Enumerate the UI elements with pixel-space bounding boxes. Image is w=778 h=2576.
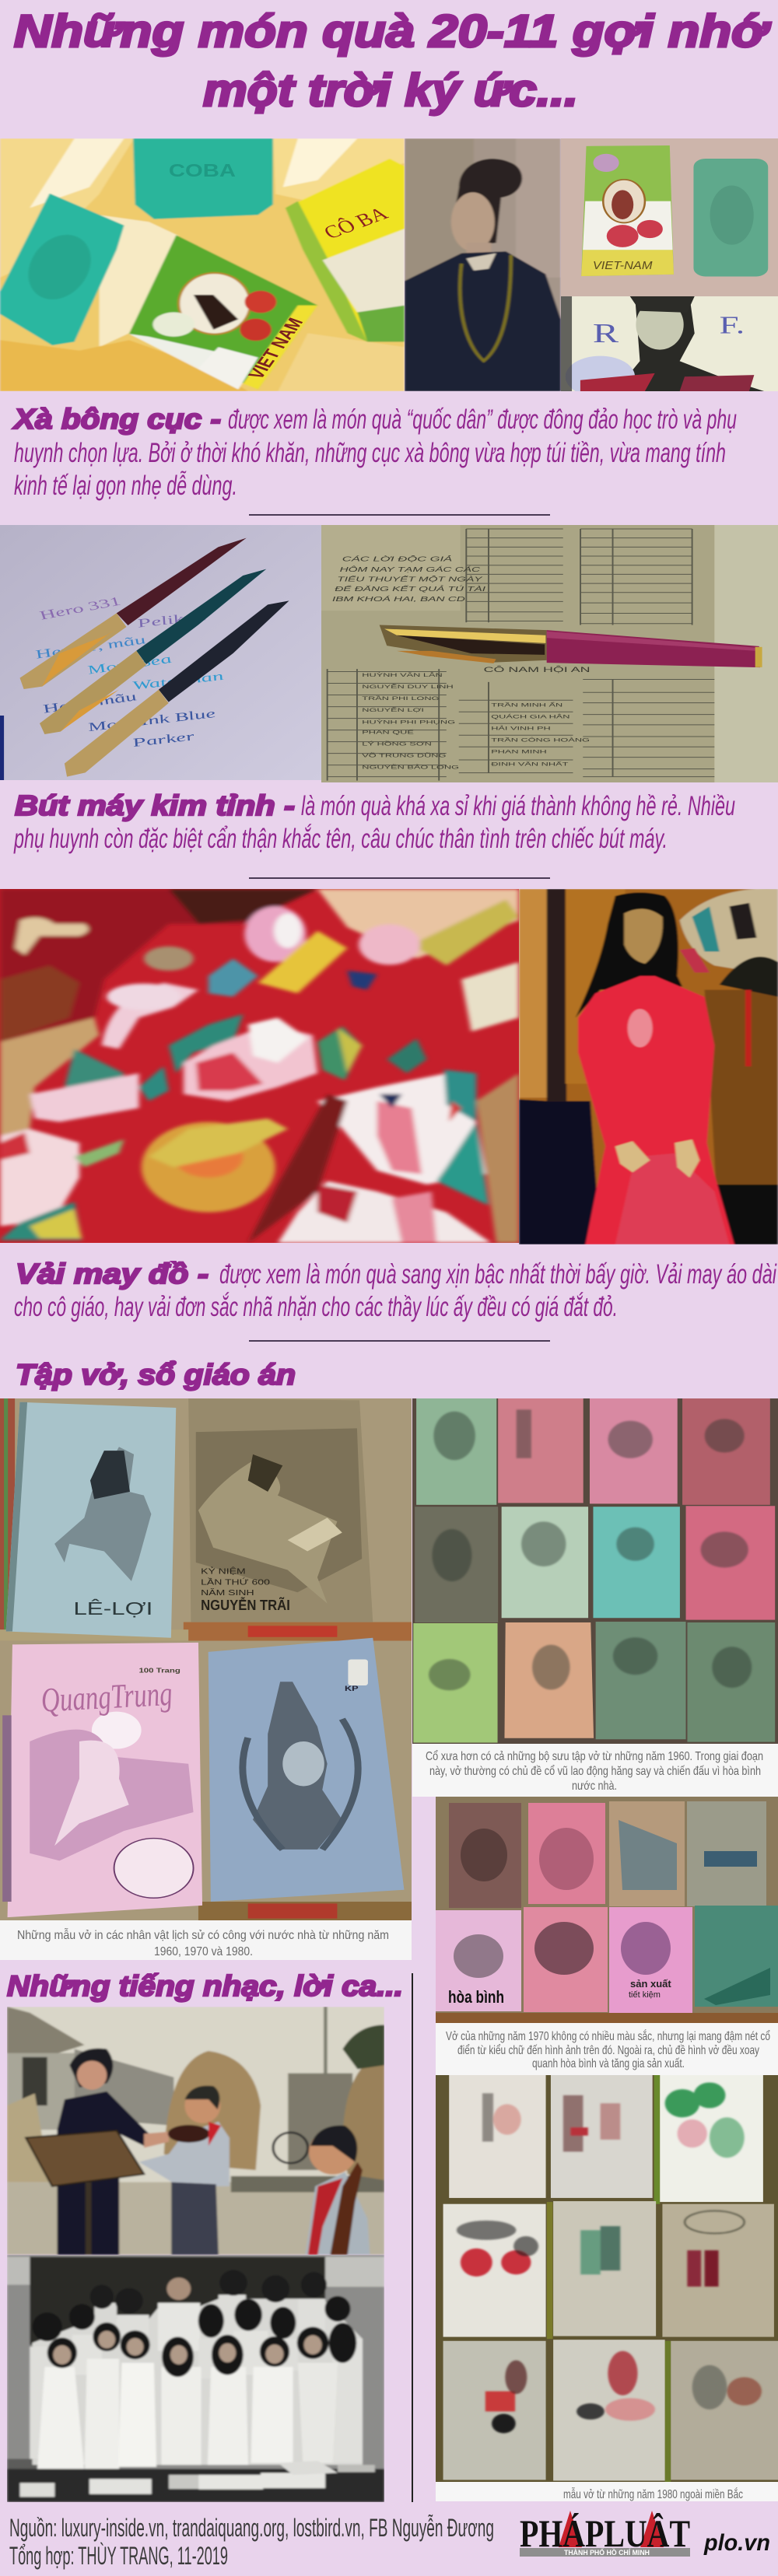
notebook drawings (457, 2082, 762, 2433)
notebook sketches: tiết kiệm (629, 1990, 661, 2000)
photo: Viet Nam soap box and bar (561, 138, 778, 296)
ledger text (332, 555, 591, 771)
text block: soap: kinh tế lại gọn nhẹ dễ dùng. (14, 471, 237, 501)
photo: school choir group (7, 2255, 384, 2502)
photo: sepia portrait of Ms Ba (405, 138, 561, 391)
photo: mannequin in red ao dai (519, 889, 778, 1244)
footer source text (9, 2514, 494, 2570)
title (14, 6, 772, 116)
photo: history notebooks (0, 1398, 412, 1920)
notebook Le Loi (6, 1402, 176, 1638)
notebook emperor portrait (209, 1638, 404, 1902)
title: Những món quà 20-11 gợi nhớ (14, 6, 772, 57)
ledger text: TRẦN PHI LONG (362, 695, 440, 702)
photo: old stamp: R (593, 319, 619, 348)
ledger text: HUỲNH PHI PHỤNG (362, 719, 455, 725)
logo: Phap Luat: PHÁPLUẬT (520, 2511, 690, 2555)
ledger text: ĐỂ ĐĂNG KẾT QUẢ TÚ TÀI (335, 585, 486, 593)
notebook Quang Trung: QuangTrung (40, 1675, 174, 1720)
photo: three fountain pens (0, 525, 321, 780)
title: một trời ký ức... (203, 65, 578, 116)
photo: 1960s notebooks grid (412, 1398, 778, 1744)
ledger text: CÔ NAM HỘI AN (484, 666, 591, 674)
text block: fountain pen: Bút máy kim tỉnh - (15, 789, 295, 821)
pen maroon (19, 538, 247, 689)
handwriting: Hero 331 (34, 595, 124, 623)
heading: notebooks: Tập vở, sổ giáo án (16, 1359, 296, 1391)
ledger text: PHAN QUẾ (362, 729, 414, 736)
notebook Nguyen Trai: KỶ NIỆM (201, 1566, 246, 1576)
ledger text: IBM KHOÁ HAI, BAN CD (332, 595, 465, 603)
caption: 1960s notebooks: nước nhà. (572, 1780, 617, 1793)
caption: 1980s notebooks (436, 2482, 778, 2501)
handwriting: Waterman (130, 670, 226, 693)
ledger text: TIỂU THUYẾT MỘT NGÀY (337, 576, 483, 583)
pen black (65, 600, 289, 777)
handwriting: Parker (129, 730, 198, 750)
heading: music: Những tiếng nhạc, lời ca... (7, 1970, 403, 2002)
handwriting: Pelikan (134, 610, 209, 631)
logo: Phap Luat: THÀNH PHỐ HỒ CHÍ MINH (564, 2548, 650, 2557)
caption: history notebooks: 1960, 1970 và 1980. (154, 1945, 253, 1958)
logo: plo.vn: plo.vn (703, 2530, 770, 2556)
ledger text: NGUYỄN LỢI (362, 707, 424, 713)
ledger text: TRẦN CÔNG HOÀNG (491, 737, 590, 744)
ledger text: LÝ HỒNG SƠN (362, 740, 432, 747)
text block: soap (12, 403, 737, 501)
caption: 1970s notebooks: quanh hòa bình và tăng gia sản xuất. (532, 2057, 685, 2070)
caption: 1970s notebooks (436, 2023, 778, 2075)
notebook Nguyen Trai: NGUYỄN TRÃI (201, 1596, 290, 1613)
notebook sketches: hòa bình (448, 1987, 504, 2007)
notebook Nguyen Trai (188, 1398, 373, 1622)
photo: old stamp (561, 296, 778, 391)
soap box labels: COBA (169, 161, 236, 181)
notebook sketches: sản xuất (630, 1978, 671, 1990)
purple pen (380, 625, 762, 667)
soap box labels (169, 161, 392, 382)
handwriting: Hero 1, mãu (31, 633, 149, 662)
pen teal (40, 569, 266, 734)
notebook Nguyen Trai: NĂM SINH (201, 1587, 254, 1598)
handwriting: Mont Sea (83, 653, 174, 677)
ledger text: ĐINH VĂN NHẤT (491, 761, 568, 767)
photo: pen on old ledger (321, 525, 778, 782)
text block: fountain pen (13, 789, 735, 854)
ledger text: NGUYỄN BẢO LONG (362, 764, 459, 771)
caption: 1960s notebooks (412, 1744, 778, 1797)
handwriting (31, 595, 226, 750)
photo: 1970s notebooks grid (436, 1797, 778, 2023)
photo: old stamp: F. (720, 313, 745, 339)
notebook emperor portrait: KP (345, 1685, 359, 1693)
photo: 1980s northern notebooks (436, 2075, 778, 2482)
soap box labels: CÔ BA (319, 203, 392, 243)
ledger text: CÁC LỜI ĐỘC GIẢ (342, 555, 452, 563)
handwriting: Mont Ink Blue (84, 707, 218, 734)
photo: Viet Nam soap box and bar: VIET-NAM (593, 259, 653, 271)
text block: fabric: Vải may đồ - (16, 1258, 209, 1290)
footer source text: Tổng hợp: THÙY TRANG, 11-2019 (9, 2542, 228, 2570)
caption: history notebooks: Những mẫu vở in các nhân vật lịch sử có công với nước nhà từ những năm (17, 1927, 389, 1942)
photo: violin lesson (7, 2007, 384, 2255)
ledger text: NGUYỄN DUY LINH (362, 684, 454, 690)
notebook Le Loi: LÊ-LỢI (73, 1598, 152, 1619)
notebook Quang Trung: 100 Trang (138, 1667, 180, 1675)
text block: soap: Xà bông cục - (12, 403, 221, 435)
photo: soap bars on yellow background (0, 138, 405, 391)
ledger text: PHAN MINH (491, 749, 547, 755)
caption: history notebooks (0, 1920, 412, 1960)
ledger text: VÕ TRUNG DŨNG (362, 752, 447, 759)
soap box labels: VIET NAM (244, 315, 307, 382)
ledger text: TRẦN MINH ẨN (491, 702, 562, 709)
ledger text: HẢI VINH PH (491, 725, 551, 732)
ledger text: QUÁCH GIA HÂN (491, 713, 570, 720)
ledger text: HÔM NAY TẠM GÁC CÁC (340, 565, 480, 573)
text block: fabric (14, 1258, 777, 1322)
notebook Quang Trung (2, 1643, 202, 1917)
handwriting: Hero, mãu (39, 690, 139, 716)
ledger text: HUỲNH VĂN LÂN (362, 672, 443, 678)
notebook sketches (448, 1820, 770, 2007)
notebook Nguyen Trai: LẦN THỨ 600 (201, 1577, 270, 1587)
photo: red floral fabric (0, 889, 519, 1243)
ledger grid (328, 529, 714, 781)
notebook sketches (429, 1409, 752, 1690)
